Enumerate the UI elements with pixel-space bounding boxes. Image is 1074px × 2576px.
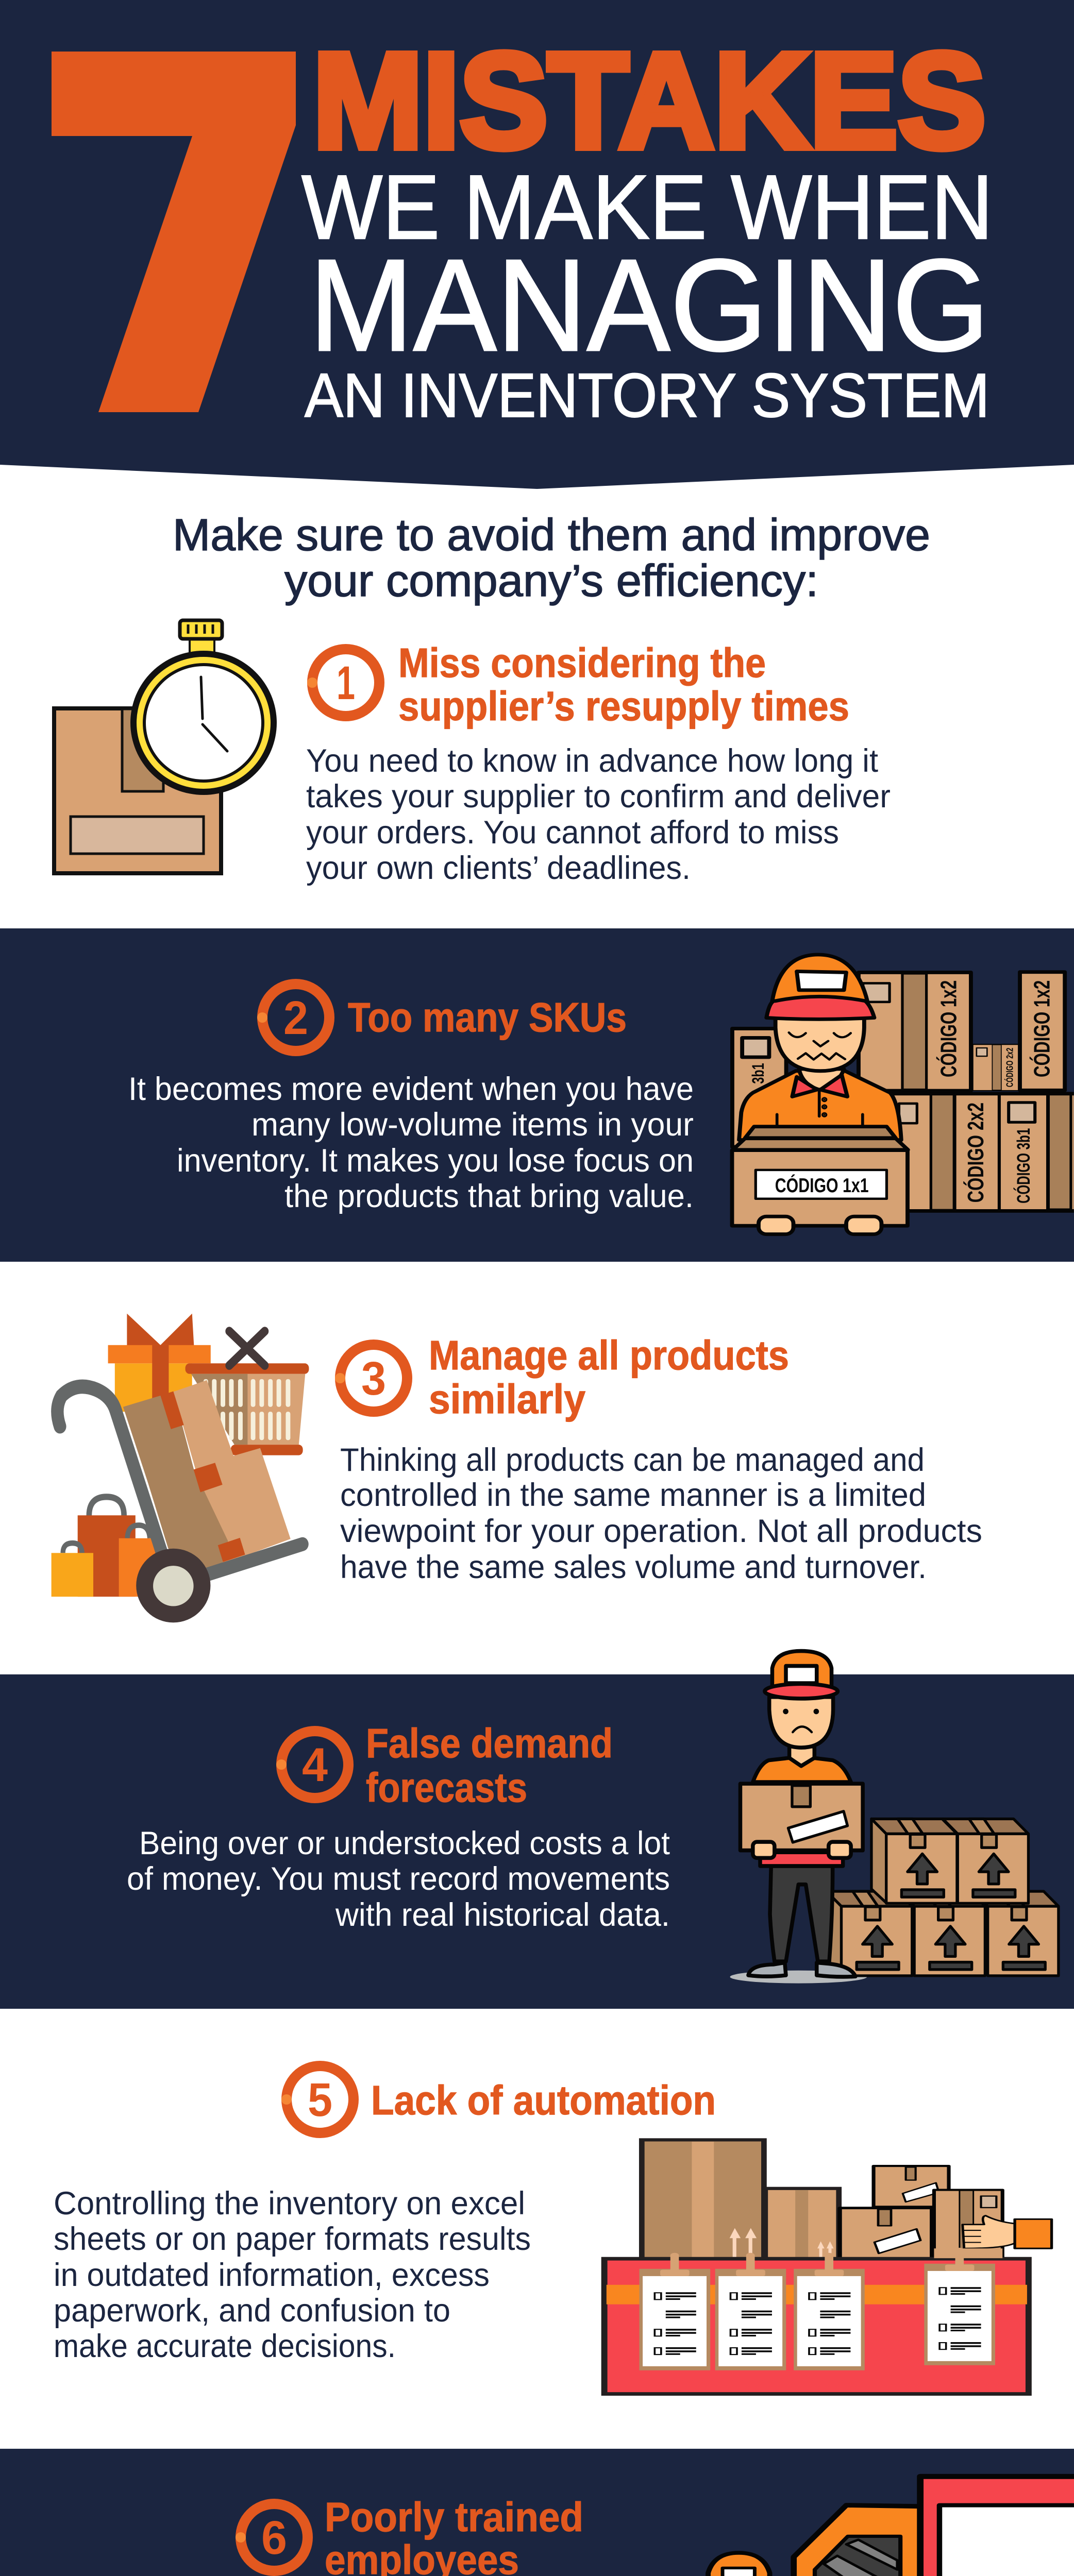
heading (325, 2494, 583, 2576)
number badge 2 (257, 984, 329, 1051)
number badge 6 (236, 2504, 308, 2571)
title: AN INVENTORY SYSTEM (305, 360, 989, 430)
number badge 2: 2 (283, 992, 308, 1044)
number badge 3 (335, 1345, 407, 1412)
number badge 4 (276, 1731, 348, 1798)
number badge 5 (281, 2066, 354, 2133)
heading: Miss considering the (398, 640, 766, 686)
band background (0, 1674, 1074, 2009)
heading: False demand (366, 1720, 613, 1766)
heading (398, 640, 849, 729)
band background (0, 928, 1074, 1262)
illustration: worker with coded boxes: CÓDIGO 3b1 (1013, 1128, 1034, 1204)
band background (0, 2449, 1074, 2576)
heading: Too many SKUs (348, 994, 627, 1040)
body text: your own clients’ deadlines. (306, 850, 691, 886)
body text: your orders. You cannot afford to miss (306, 815, 839, 851)
illustration: truck and seated worker (618, 2477, 1074, 2576)
body text: make accurate decisions. (54, 2328, 396, 2364)
body text: takes your supplier to confirm and deliver (306, 778, 891, 815)
heading: forecasts (366, 1765, 527, 1810)
body text: many low-volume items in your (251, 1107, 694, 1143)
panel: mistake 4 (0, 1651, 1074, 2009)
body text: of money. You must record movements (127, 1861, 670, 1897)
body text: Controlling the inventory on excel (54, 2185, 525, 2222)
heading: similarly (429, 1376, 585, 1422)
body text: Thinking all products can be managed and (340, 1442, 925, 1478)
illustration: table with boxes and clipboards (605, 2140, 1052, 2394)
panel: mistake 6 (0, 2449, 1074, 2576)
title: MANAGING (309, 232, 989, 378)
header background with chevron (0, 0, 1074, 489)
body text: viewpoint for your operation. Not all products (340, 1513, 982, 1549)
number badge 3: 3 (361, 1352, 386, 1405)
body text: Being over or understocked costs a lot (139, 1825, 670, 1861)
illustration: worker with coded boxes: 3b1 (748, 1063, 767, 1084)
body text: It becomes more evident when you have (128, 1071, 694, 1107)
body text: paperwork, and confusion to (54, 2293, 450, 2329)
illustration: worker with coded boxes: CÓDIGO 1x1 (775, 1174, 869, 1197)
subtitle (173, 510, 930, 606)
subtitle: your company’s efficiency: (284, 556, 818, 606)
panel: mistake 3 (52, 1314, 982, 1622)
body text: inventory. It makes you lose focus on (177, 1143, 694, 1179)
body text (306, 743, 891, 886)
body text: have the same sales volume and turnover. (340, 1549, 927, 1585)
illustration: worker with coded boxes: CÓDIGO 1x2 (936, 980, 961, 1077)
body text (127, 1825, 670, 1933)
body text: the products that bring value. (284, 1178, 694, 1214)
heading: Manage all products (429, 1332, 789, 1378)
illustration: worker with coded boxes: CÓDIGO 2x2 (1003, 1047, 1015, 1087)
title: WE MAKE WHEN (301, 156, 993, 258)
body text: You need to know in advance how long it (306, 743, 878, 779)
body text: sheets or on paper formats results (54, 2221, 531, 2257)
illustration: worker with coded boxes: CÓDIGO 1x2 (1029, 980, 1054, 1077)
body text (54, 2185, 531, 2364)
illustration: worker with coded boxes (732, 955, 1074, 1234)
illustration: worker and crates (730, 1651, 1059, 1984)
panel: mistake 2 (0, 928, 1074, 1262)
number badge 6: 6 (261, 2512, 287, 2564)
title (301, 25, 993, 430)
panel: mistake 1 (54, 620, 891, 886)
body text: controlled in the same manner is a limited (340, 1477, 926, 1513)
panel: mistake 5 (54, 2066, 1052, 2394)
body text: in outdated information, excess (54, 2257, 490, 2293)
illustration: hand truck with gifts, basket and bags (52, 1314, 309, 1622)
illustration: worker with coded boxes: CÓDIGO 2x2 (963, 1103, 988, 1202)
heading: supplier’s resupply times (398, 683, 849, 729)
subtitle: Make sure to avoid them and improve (173, 510, 930, 560)
number badge 1 (307, 649, 379, 716)
heading (429, 1332, 789, 1422)
title: MISTAKES (313, 25, 986, 176)
heading (366, 1720, 613, 1810)
body text (128, 1071, 694, 1214)
number badge 5: 5 (308, 2074, 332, 2126)
panel: header (0, 0, 1074, 489)
big number 7 (52, 52, 296, 412)
body text: with real historical data. (335, 1897, 670, 1933)
icon: box and stopwatch (54, 620, 277, 873)
number badge 1: 1 (337, 657, 355, 709)
heading: Poorly trained (325, 2494, 583, 2540)
body text (340, 1442, 982, 1585)
number badge 4: 4 (302, 1739, 328, 1791)
heading: Lack of automation (371, 2077, 716, 2123)
